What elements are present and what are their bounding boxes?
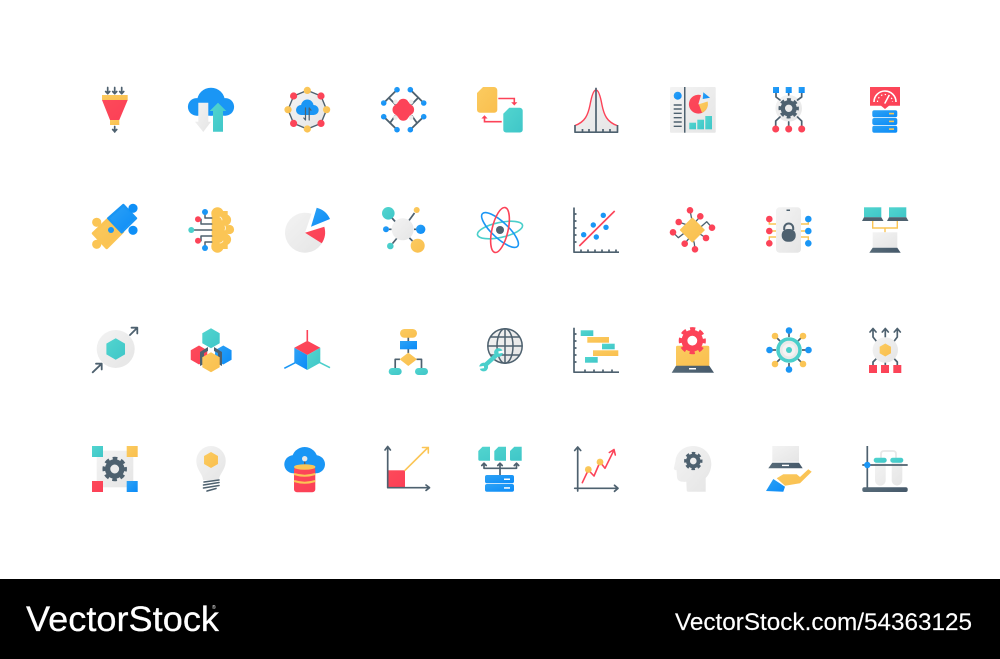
icon: mobile security [766, 207, 812, 253]
icon: report with charts [670, 87, 716, 133]
banner: brand footer [0, 579, 1000, 659]
icon: head with gear [674, 446, 711, 492]
brand name: VectorStock [26, 599, 219, 639]
icon: cube cluster [191, 328, 232, 372]
icon: cloud network ring [284, 87, 330, 133]
icon: documents to servers [478, 447, 522, 492]
registered mark: ® [212, 604, 216, 611]
icon: puzzle pieces [92, 204, 138, 249]
icon: cube input and output [869, 328, 901, 373]
icon: digital brain [188, 207, 234, 253]
icon: puzzle network [381, 87, 427, 132]
icon: node graph [382, 207, 425, 253]
icon: connected laptops [862, 207, 908, 253]
icon: pie chart [285, 208, 330, 253]
icon: idea bulb [196, 446, 226, 491]
icon: bell curve [575, 88, 618, 132]
icon: test tubes on stand [862, 446, 908, 492]
icon: gear with nodes [772, 87, 805, 132]
icon: file transfer [477, 87, 523, 132]
icon: hand holding laptop [766, 446, 812, 492]
icon: laptop with gear [672, 329, 714, 373]
icon: scaling cube [93, 328, 137, 372]
icon: chip with nodes [670, 207, 715, 253]
icon: cloud database [284, 447, 325, 492]
icon: gear hub network [766, 327, 812, 373]
image reference: VectorStock.com/54363125 [675, 609, 972, 636]
icon: flowchart [389, 329, 428, 375]
icon: globe and wrench [478, 328, 523, 371]
icon: server speed gauge [870, 87, 900, 133]
icon: 3d cube axes [284, 330, 330, 370]
icon: gantt chart [574, 328, 619, 372]
icon: scatter plot [574, 208, 619, 252]
icon: atom [476, 206, 524, 254]
icon: gear in coloured squares [92, 446, 138, 492]
icon: cloud upload and download [188, 88, 234, 132]
icon: growth axis chart [385, 446, 430, 490]
icon: rising line chart [575, 447, 618, 491]
icon: funnel [102, 88, 128, 132]
